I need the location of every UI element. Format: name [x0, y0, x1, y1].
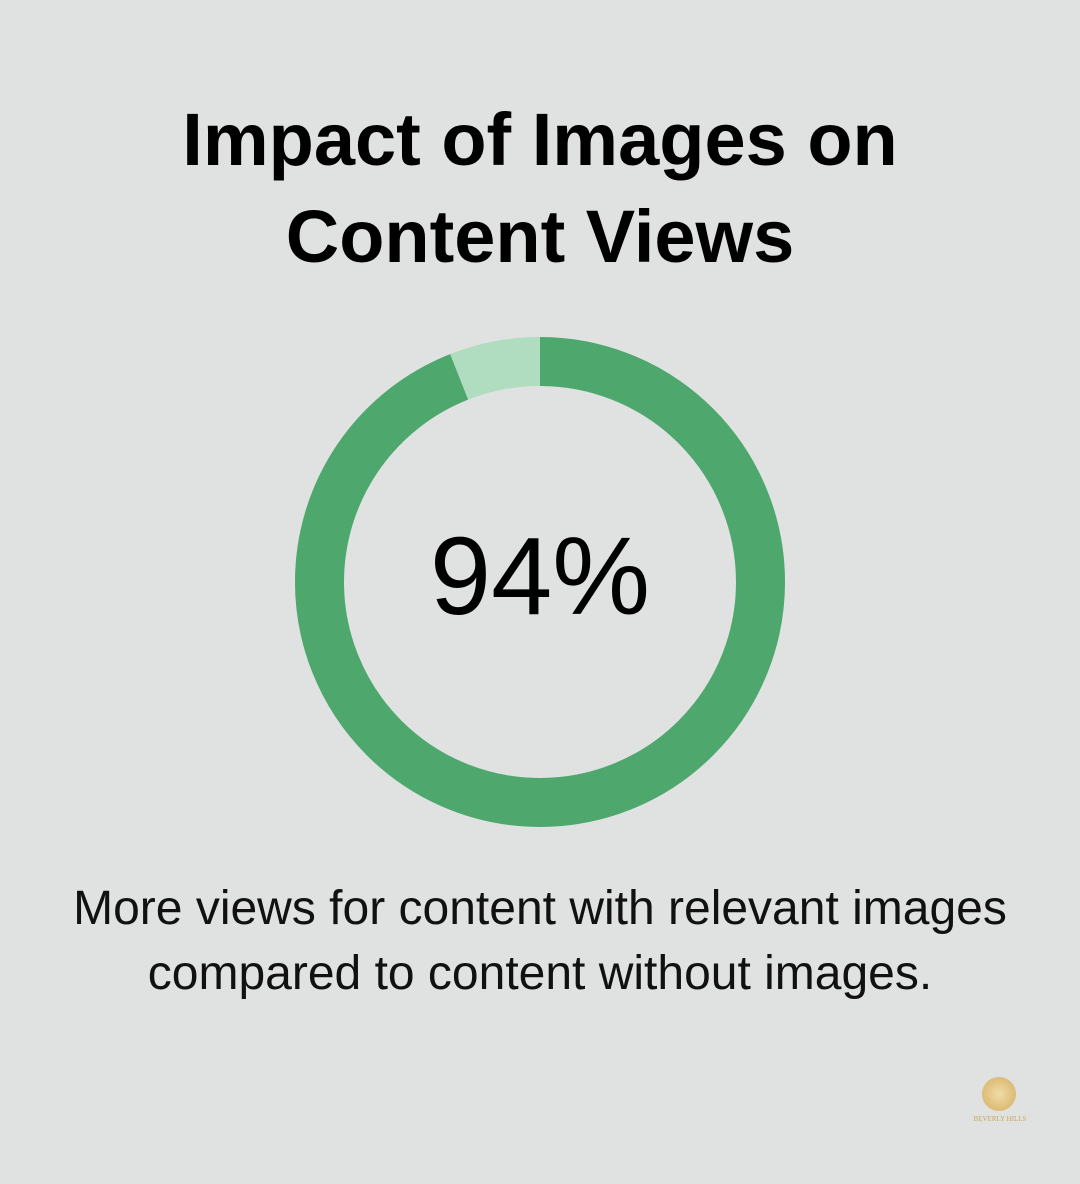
big number: 94% — [430, 515, 650, 638]
ring: remaining 6% — [320, 362, 760, 802]
description — [73, 882, 1007, 1000]
logo text: BEVERLY HILLS — [974, 1115, 1026, 1123]
icon: logo medallion — [982, 1077, 1016, 1111]
title — [182, 98, 898, 278]
description: compared to content without images. — [148, 947, 932, 1000]
title: Impact of Images on — [182, 98, 898, 181]
ring: 94% segment — [320, 362, 760, 802]
description: More views for content with relevant images — [73, 882, 1007, 935]
title: Content Views — [286, 195, 794, 278]
logo — [974, 1077, 1026, 1123]
